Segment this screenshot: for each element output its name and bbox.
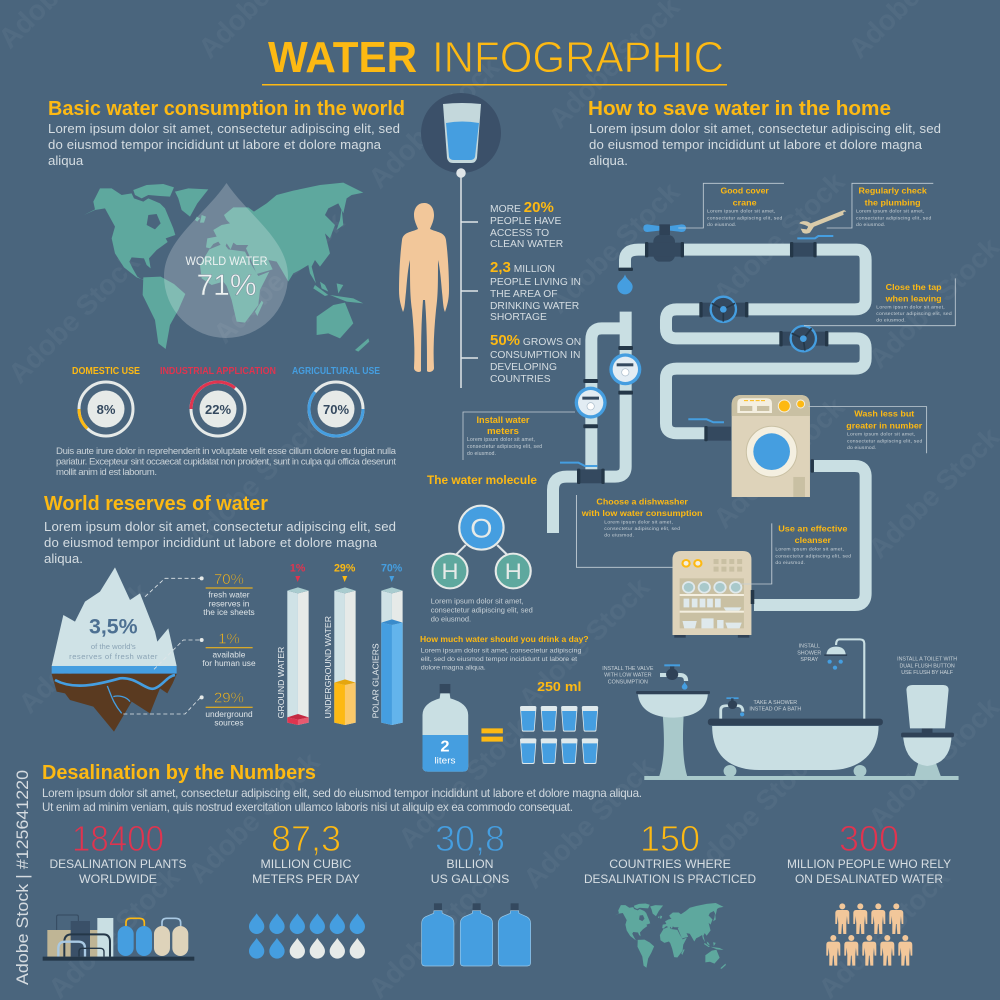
stat: 70% ice sheets (203, 571, 255, 617)
stat: 29% underground: 29% (214, 690, 244, 707)
stat: million cubic meters: 87,3 (271, 818, 341, 859)
callout: good cover crane: consectetur adipiscing elit, sed (707, 215, 783, 221)
callout: effective cleanser: consectetur adipiscing elit, sed (775, 553, 851, 559)
callout: good cover crane: Good cover (720, 186, 769, 196)
watermarks: Adobe Stock (392, 711, 536, 854)
label: shower spray tip: SHOWER (797, 650, 822, 656)
label: 250 ml: 250 ml (537, 678, 581, 694)
icon: washer valve (688, 419, 731, 441)
stat: 1% human use: 1% (218, 630, 240, 647)
icon: shower (824, 639, 864, 719)
stat: people: 300 (839, 818, 899, 859)
stat: people: MILLION PEOPLE WHO RELY (787, 857, 951, 871)
callout: effective cleanser: cleanser (795, 535, 832, 545)
callout: install water meters: do eiusmod. (467, 451, 496, 457)
bar: ground water: GROUND WATER (277, 646, 286, 718)
label: toilet tip: INSTALL A TOILET WITH (897, 657, 957, 663)
stat: desalination plants: WORLDWIDE (79, 872, 157, 886)
title (262, 33, 727, 86)
stat: clean water: ACCESS TO (490, 228, 549, 239)
callout: choose a dishwasher: Choose a dishwasher (596, 497, 689, 507)
watermarks: Adobe Stock (682, 741, 826, 884)
world map with water drop: WORLD WATER (186, 256, 268, 268)
stat: water shortage: PEOPLE LIVING IN (490, 277, 581, 288)
heading: basic water consumption: Basic water consumption in the world (48, 98, 405, 120)
stat: 29% underground: underground (205, 709, 253, 719)
text block: consumption intro (48, 121, 400, 168)
text block: use description (56, 446, 397, 478)
callout: check the plumbing: Lorem ipsum dolor sit amet, (856, 208, 924, 214)
stat: 1% human use: for human use (202, 658, 256, 668)
bar: polar glaciers (371, 563, 403, 725)
stat: water shortage: SHORTAGE (490, 312, 547, 323)
icon: bottom valve (560, 463, 605, 484)
text block: desalination intro: Lorem ipsum dolor sit amet, consectetur adipiscing elit, sed do eiusmod tempor incididunt ut labore et dolore magna aliqua. (42, 787, 642, 800)
icon: washing machine (732, 395, 814, 497)
callout: check the plumbing: do eiusmod. (856, 222, 885, 228)
callout: wash less: consectetur adipiscing elit, sed (847, 438, 923, 444)
watermarks: Adobe Stock (362, 51, 506, 194)
label: valve tip (602, 666, 654, 685)
reserves diagram (52, 563, 403, 732)
icon: cover crane valve (618, 224, 686, 271)
stat: 70% ice sheets: reserves in (209, 598, 250, 608)
icon: dishwasher (672, 551, 754, 638)
stat: clean water: PEOPLE HAVE (490, 216, 561, 227)
text block: save water intro (589, 121, 941, 168)
icon: water bottle 2 liters: liters (434, 756, 456, 766)
callout: close the tap: consectetur adipiscing elit, sed (876, 311, 952, 317)
callout: close the tap (804, 278, 955, 326)
icon: ring valve one (699, 297, 748, 322)
icon: group of people (826, 903, 912, 966)
text block: use description: Duis aute irure dolor in reprehenderit in voluptate velit esse cillum dolore eu fugiat nulla (56, 446, 397, 457)
watermarks: Adobe Stock (542, 176, 686, 319)
label: valve tip: INSTALL THE VALVE (602, 666, 654, 672)
donut: agricultural use: AGRICULTURAL USE (292, 366, 380, 377)
icon: water meter one (609, 346, 641, 395)
bar: ground water: 1% (290, 563, 306, 575)
text block: use description: mollit anim id est laborum. (56, 467, 157, 478)
callout: wash less: do eiusmod. (847, 445, 876, 451)
text block: how much water: dolore magna aliqua. (421, 665, 486, 672)
label: toilet tip: DUAL FLUSH BUTTON (899, 663, 955, 669)
outlet pipe (754, 466, 866, 605)
text block: consumption intro: Lorem ipsum dolor sit amet, consectetur adipiscing elit, sed (48, 121, 400, 136)
icon: bathtub with tap (708, 697, 883, 777)
icon: water bottle 2 liters: 2 (440, 739, 450, 756)
stat: clean water (490, 199, 563, 250)
stat: people (787, 818, 951, 886)
icon: wrench on pipe (790, 212, 847, 257)
callout: install water meters: Install water (476, 415, 530, 425)
label: toilet tip (897, 657, 957, 676)
watermarks: Adobe Stock (182, 411, 326, 554)
watermarks: Adobe Stock (812, 861, 956, 1000)
watermarks: Adobe Stock (42, 861, 186, 1000)
callout: close the tap: do eiusmod. (876, 318, 906, 324)
callout: good cover crane: crane (733, 197, 757, 207)
label: shower instead of bath tip (749, 700, 802, 713)
text block: save water intro: Lorem ipsum dolor sit amet, consectetur adipiscing elit, sed (589, 121, 941, 136)
iceberg: of the world's (91, 642, 136, 651)
icon: twelve water drops (249, 913, 365, 959)
bar: polar glaciers: POLAR GLACIERS (371, 643, 380, 718)
icon: desalination plant (43, 915, 194, 961)
diagram: water molecule: H (441, 559, 459, 584)
callout: install water meters: consectetur adipiscing elit, sed (467, 444, 542, 450)
stat: consumption growth (490, 332, 581, 385)
iceberg (52, 567, 177, 732)
callout: close the tap: Lorem ipsum dolor sit amet, (876, 304, 945, 310)
lower middle section (420, 495, 959, 780)
callout: effective cleanser (740, 523, 851, 584)
text block: molecule description: Lorem ipsum dolor sit amet, (431, 597, 524, 605)
stat: water shortage: THE AREA OF (490, 289, 558, 300)
heading: how much water: How much water should you drink a day? (420, 634, 589, 644)
text block: reserves intro: do eiusmod tempor incididunt ut labore et dolore magna (44, 535, 378, 550)
callout: check the plumbing (827, 183, 933, 228)
small world map (615, 903, 726, 969)
icon: falling drop (617, 274, 633, 294)
diagram: water molecule: H (505, 559, 522, 584)
text block: how much water: Lorem ipsum dolor sit amet, consectetur adipiscing (421, 648, 582, 654)
icon: sink with tap (636, 664, 710, 776)
callout: choose a dishwasher: with low water consumption (581, 508, 702, 518)
icon: water meter two (575, 379, 607, 428)
stat: 29% underground: sources (214, 718, 244, 728)
world map with water drop: 71% (196, 269, 257, 302)
text block: reserves intro (44, 519, 396, 566)
stat: countries: 150 (640, 818, 700, 859)
stat: consumption growth: COUNTRIES (490, 374, 551, 385)
heading: save water in the home: How to save water in the home (588, 98, 891, 120)
stat: 70% ice sheets: the ice sheets (203, 607, 255, 617)
callout: install water meters (463, 412, 575, 460)
text block: molecule description: consectetur adipiscing elit, sed (431, 606, 533, 614)
callout: choose a dishwasher: Lorem ipsum dolor sit amet, (604, 519, 673, 525)
diagram: water molecule: O (470, 513, 493, 543)
callout: check the plumbing: consectetur adipiscing elit, sed (856, 215, 932, 221)
stat: consumption growth: 50% GROWS ON (490, 332, 581, 349)
text block: reserves intro: aliqua. (44, 551, 83, 566)
watermarks: Adobe Stock (512, 571, 656, 714)
icon: glass of water (421, 93, 501, 173)
callout: install water meters: Lorem ipsum dolor sit amet, (467, 437, 535, 443)
stat: million cubic meters: METERS PER DAY (252, 872, 360, 886)
label: valve tip: WITH LOW WATER (604, 673, 652, 679)
stat: desalination plants: 18400 (72, 818, 164, 859)
watermarks: Adobe Stock (12, 576, 156, 719)
text block: consumption intro: aliqua (48, 153, 84, 168)
text block: save water intro: aliqua. (589, 153, 628, 168)
callout: wash less: greater in number (846, 420, 923, 430)
lower pipes with meters (553, 312, 626, 533)
stat: countries (584, 818, 756, 886)
heading: water molecule: The water molecule (427, 473, 537, 487)
diagram: water molecule (432, 506, 531, 588)
iceberg: reserves of fresh water (69, 652, 158, 661)
floor line (644, 776, 959, 780)
donut: agricultural use (292, 366, 380, 436)
stat: clean water: MORE 20% (490, 199, 554, 216)
callout: close the tap: Close the tap (886, 282, 942, 292)
stat: desalination plants: DESALINATION PLANTS (50, 857, 186, 871)
callout: install water meters: meters (487, 426, 519, 436)
stat: 1% human use (202, 630, 256, 668)
callout: choose a dishwasher: consectetur adipiscing elit, sed (604, 526, 680, 532)
leader dots (200, 576, 204, 699)
stat: million cubic meters: MILLION CUBIC (261, 857, 352, 871)
plumbing diagram (553, 183, 955, 605)
label: shower instead of bath tip: INSTEAD OF A BATH (749, 707, 802, 713)
stat: 70% ice sheets: 70% (214, 571, 244, 588)
label: shower spray tip: INSTALL (799, 644, 820, 650)
callout: close the tap: when leaving (885, 294, 942, 304)
stat: water shortage: DRINKING WATER (490, 301, 579, 312)
text block: how much water: elit, sed do eiusmod tempor incididunt ut labore et (421, 656, 577, 663)
icon: equals sign (481, 728, 503, 742)
stat: water shortage (490, 259, 581, 323)
icon: toilet (901, 685, 954, 776)
donut: domestic use: DOMESTIC USE (72, 366, 140, 377)
text block: reserves intro: Lorem ipsum dolor sit amet, consectetur adipiscing elit, sed (44, 519, 396, 534)
bar: underground water: UNDERGROUND WATER (324, 616, 333, 718)
watermarks: Adobe Stock (362, 861, 506, 1000)
watermarks: Adobe Stock (182, 746, 326, 889)
donut: industrial application (160, 366, 276, 436)
callout: effective cleanser: Use an effective (778, 524, 848, 534)
callout: wash less: Wash less but (854, 409, 914, 419)
bar: underground water: 29% (334, 563, 356, 575)
stat: desalination plants (50, 818, 186, 886)
label: toilet tip: USE FLUSH BY HALF (901, 670, 953, 676)
human body figure (399, 203, 449, 372)
watermarks: Adobe Stock (707, 391, 851, 534)
stat: countries: DESALINATION IS PRACTICED (584, 872, 756, 886)
stat: 70% ice sheets: fresh water (208, 590, 250, 600)
text block: molecule description: do eiusmod. (431, 615, 471, 624)
bar: underground water (324, 563, 356, 725)
bar: polar glaciers: 70% (381, 563, 403, 575)
donut: domestic use (72, 366, 140, 436)
callout: check the plumbing: Regularly check (858, 186, 927, 196)
stat: billion gallons: US GALLONS (431, 872, 509, 886)
dashed leader lines (123, 578, 201, 714)
stat: countries: COUNTRIES WHERE (609, 857, 731, 871)
watermarks: Adobe Stock (707, 166, 851, 309)
stat: clean water: CLEAN WATER (490, 239, 563, 250)
stat: people: ON DESALINATED WATER (795, 872, 943, 886)
callout: good cover crane: do eiusmod. (707, 222, 736, 228)
watermarks: Adobe Stock (517, 751, 661, 894)
donut: agricultural use: 70% (323, 402, 349, 417)
stat: 29% underground (205, 690, 253, 728)
text block: consumption intro: do eiusmod tempor incididunt ut labore et dolore magna (48, 137, 382, 152)
callout: choose a dishwasher (576, 495, 702, 567)
donut: domestic use: 8% (97, 402, 116, 417)
stock credit: Adobe Stock | #125641220 (13, 770, 32, 985)
watermarks: Adobe Stock (207, 206, 351, 349)
callout: choose a dishwasher: do eiusmod. (604, 533, 634, 539)
callout: check the plumbing: the plumbing (865, 197, 921, 207)
icon: ring valve two (779, 326, 828, 351)
text block: molecule description (431, 597, 533, 624)
stat: water shortage: 2,3 MILLION (490, 259, 555, 276)
stat: billion gallons: BILLION (446, 857, 494, 871)
stat: billion gallons: 30,8 (435, 818, 505, 859)
label: shower spray tip (797, 644, 822, 663)
stat: consumption growth: CONSUMPTION IN (490, 350, 580, 361)
text block: use description: pariatur. Excepteur sint occaecat cupidatat non proident, sunt in culpa qui officia deserunt (56, 456, 396, 468)
watermarks: Adobe Stock (2, 246, 146, 389)
title: WATER (268, 33, 417, 82)
heading: desalination: Desalination by the Numbers (42, 762, 316, 784)
callout: effective cleanser: do eiusmod. (775, 560, 805, 566)
callout: wash less: Lorem ipsum dolor sit amet, (847, 432, 915, 438)
callout: good cover crane (678, 183, 784, 228)
stat: consumption growth: DEVELOPING (490, 362, 557, 373)
world map with water drop (84, 183, 369, 352)
text block: save water intro: do eiusmod tempor incididunt ut labore et dolore magna (589, 137, 923, 152)
label: valve tip: CONSUMPTION (608, 679, 648, 685)
label: shower spray tip: SPRAY (800, 657, 819, 663)
icon: water drop overlay (164, 183, 288, 338)
bar: ground water (277, 563, 309, 725)
title: INFOGRAPHIC (432, 33, 724, 82)
callout: good cover crane: Lorem ipsum dolor sit amet, (707, 208, 775, 214)
stat: 1% human use: available (213, 649, 246, 659)
donut: industrial application: 22% (205, 402, 231, 417)
icon: water bottle 2 liters (422, 684, 468, 772)
heading: world reserves: World reserves of water (44, 493, 268, 515)
text block: desalination intro: Ut enim ad minim veniam, quis nostrud exercitation ullamco laboris nisi ut aliquip ex ea commodo consequat. (42, 801, 573, 814)
text block: how much water (421, 648, 582, 672)
main pipe (625, 250, 866, 433)
callout: effective cleanser: Lorem ipsum dolor sit amet, (775, 547, 844, 553)
text block: desalination intro (42, 787, 642, 814)
label: shower instead of bath tip: TAKE A SHOWER (754, 700, 797, 706)
icon: three water bottles (422, 903, 531, 966)
iceberg: 3,5% (89, 614, 138, 638)
icon: eight glasses (520, 706, 598, 764)
stat: million cubic meters (252, 818, 360, 886)
callout: wash less (808, 407, 927, 453)
donut: industrial application: INDUSTRIAL APPLICATION (160, 366, 276, 377)
connector line (457, 169, 478, 388)
stat: billion gallons (431, 818, 509, 886)
